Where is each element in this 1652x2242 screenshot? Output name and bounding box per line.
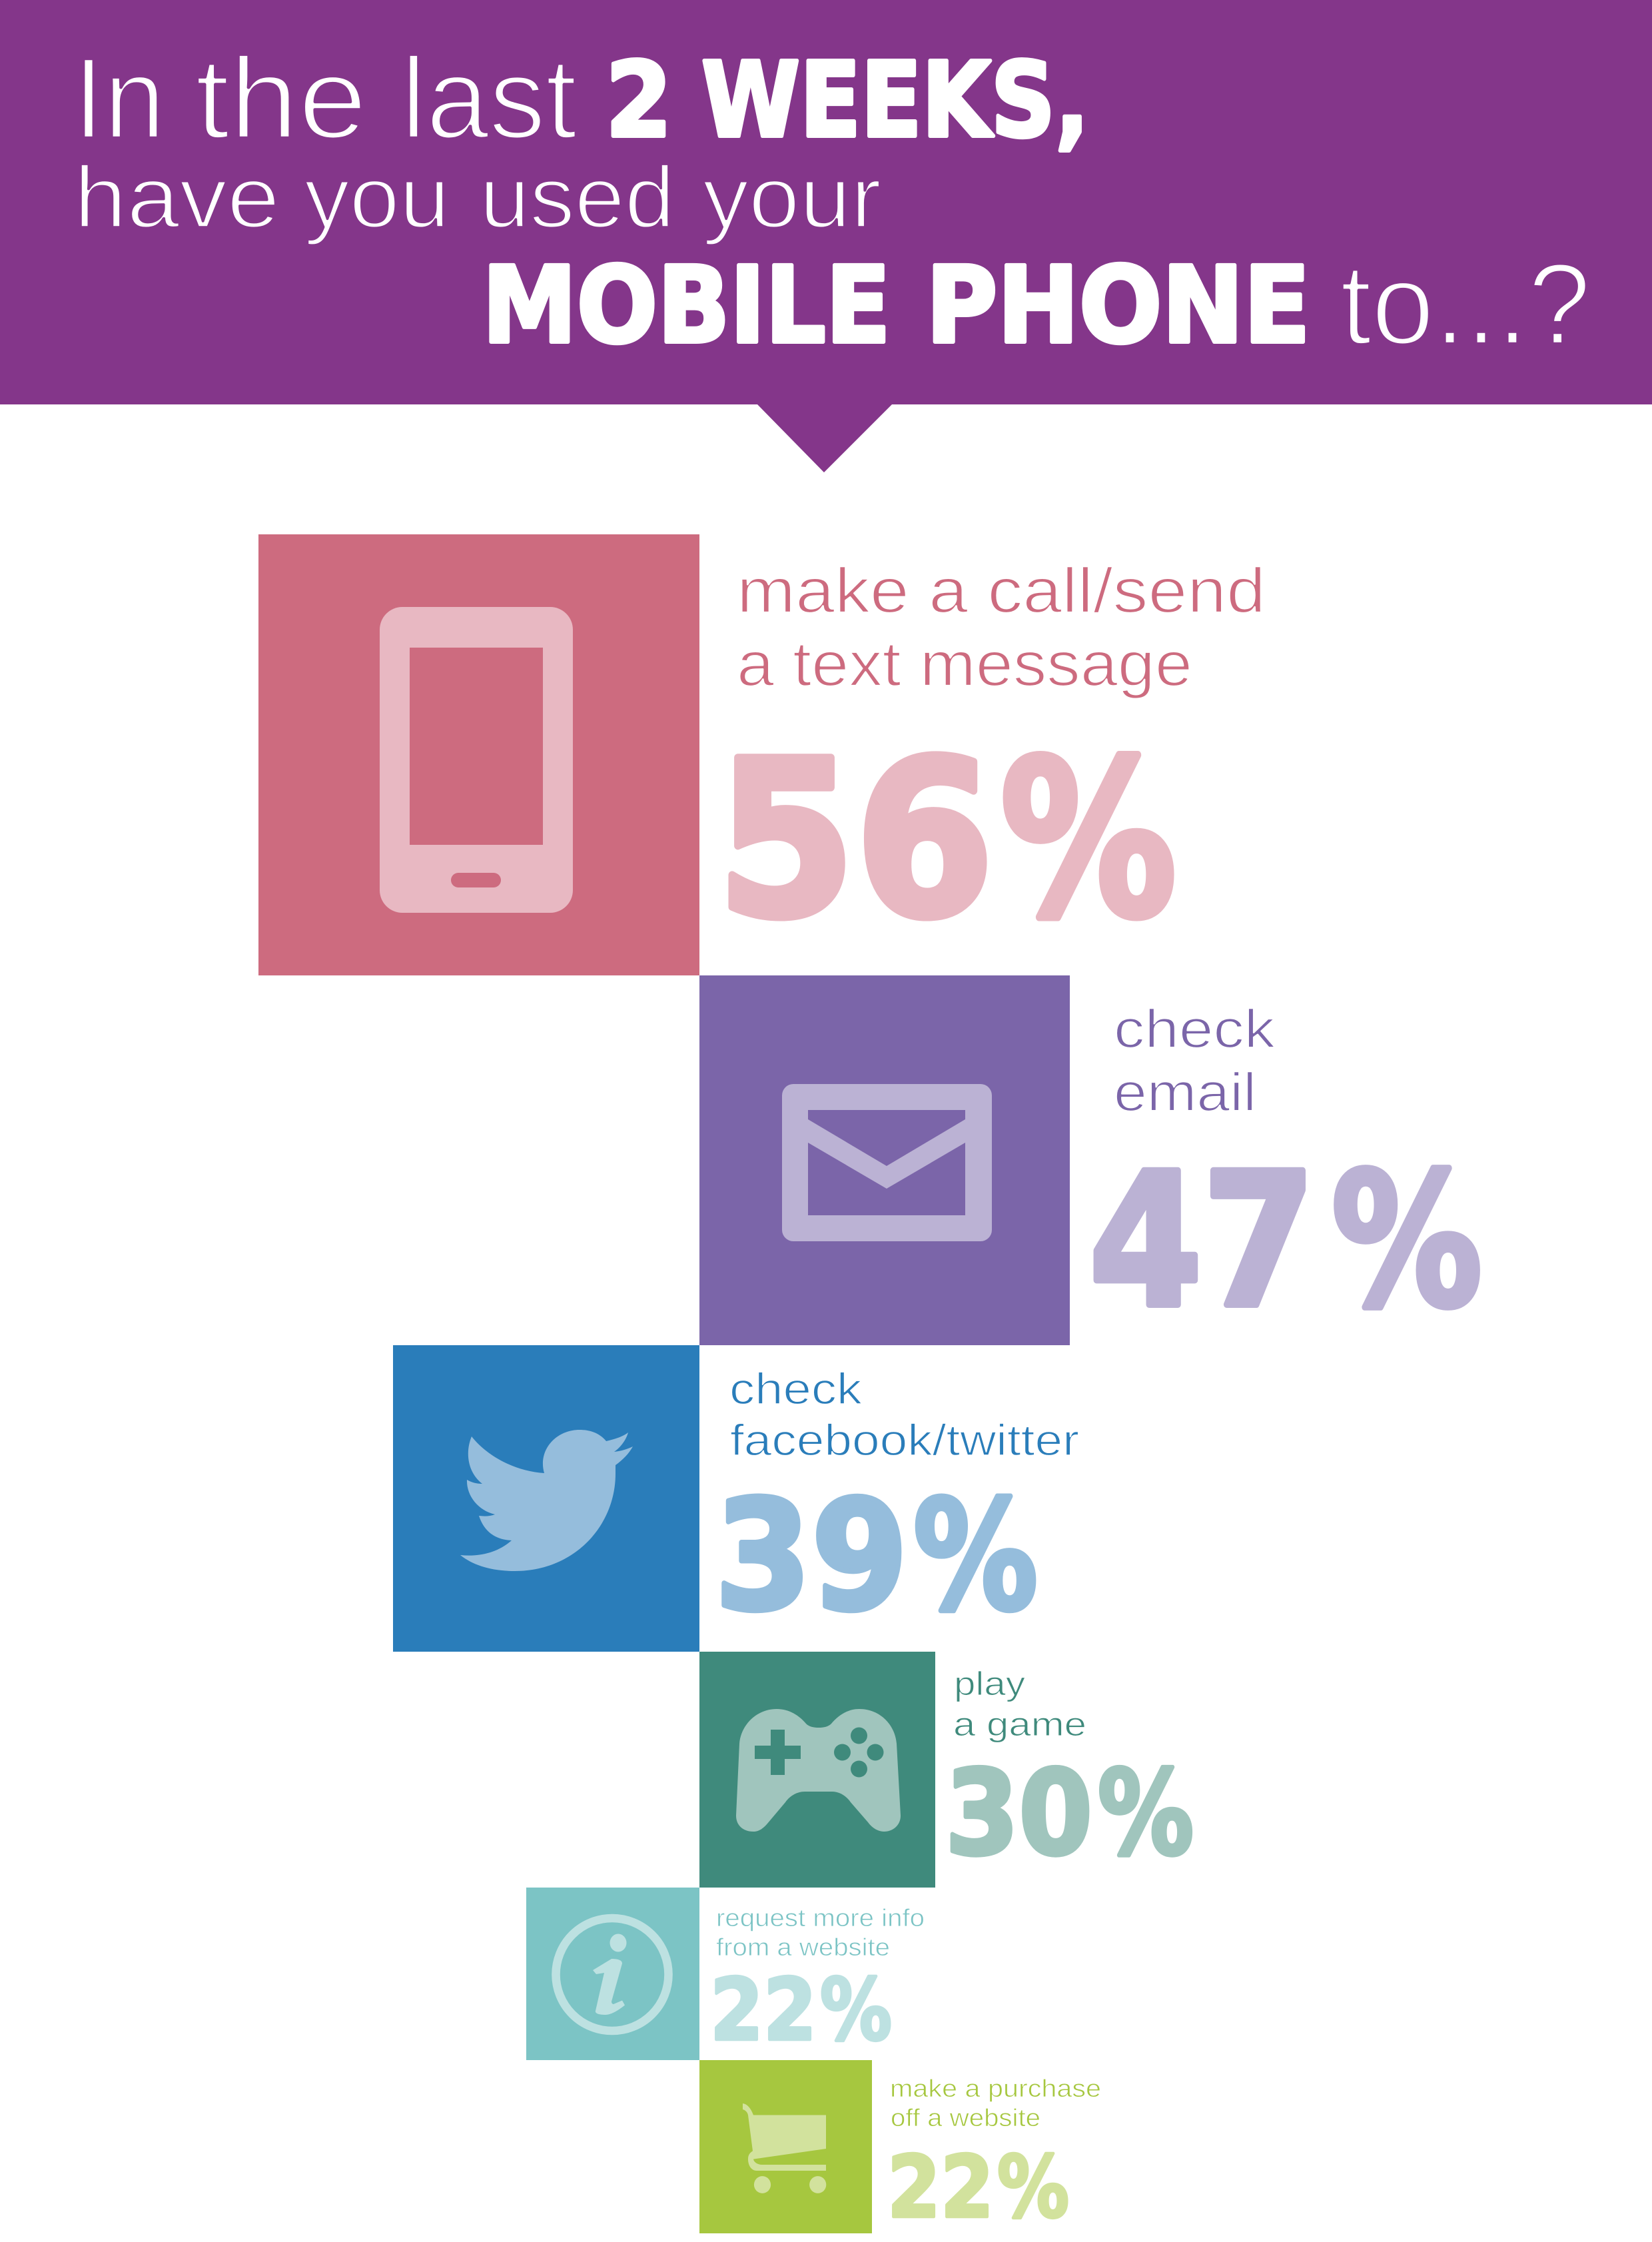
title: used: [480, 148, 675, 246]
panel: play a game: [699, 1652, 1194, 1888]
label: check email: [1114, 999, 1276, 1123]
panel: make a call / send a text message: [258, 534, 1266, 975]
icon: game controller: [736, 1709, 901, 1832]
panel: check facebook/twitter: [393, 1345, 1079, 1652]
stat: 56%: 56: [717, 715, 994, 965]
stat: 22%: 22: [887, 2138, 994, 2237]
label: check facebook/twitter: facebook/twitter: [730, 1415, 1079, 1464]
title: WEEKS,: [701, 40, 1089, 161]
title: you: [304, 148, 450, 246]
stat: 30%: [945, 1746, 1194, 1882]
label: make a purchase off a website: make a purchase: [890, 2075, 1101, 2102]
stat: 39%: [715, 1468, 1038, 1644]
stat: 47%: [1089, 1135, 1482, 1349]
teal tile: [526, 1888, 699, 2060]
stat: 47%: %: [1332, 1135, 1482, 1349]
stat: 22%: %: [820, 1961, 892, 2060]
label: check email: email: [1114, 1063, 1256, 1123]
title: the: [195, 33, 367, 163]
label: request more info from a website: from a website: [716, 1934, 890, 1961]
label: make a purchase off a website: off a website: [891, 2104, 1040, 2131]
stat: 22%: 22: [710, 1961, 817, 2060]
title: MOBILE: [482, 245, 891, 367]
title: last: [401, 33, 577, 163]
stat: 39%: %: [913, 1468, 1038, 1644]
label: check facebook/twitter: [729, 1364, 1079, 1464]
stat: 30%: %: [1098, 1746, 1194, 1882]
title: [73, 33, 1591, 368]
stat: 47%: 47: [1089, 1135, 1316, 1349]
label: check facebook/twitter: check: [729, 1364, 863, 1413]
header banner: [0, 0, 1652, 472]
icon: info circle: [556, 1918, 669, 2031]
stat: 22%: [887, 2138, 1069, 2237]
stat: 30%: 30: [945, 1746, 1092, 1882]
icon: smartphone: [380, 607, 573, 913]
stat: 39%: 39: [715, 1468, 908, 1644]
label: play a game: play: [954, 1665, 1025, 1702]
title: your: [703, 148, 881, 246]
title: 2: [606, 40, 672, 161]
purple tile: [699, 975, 1070, 1345]
title: to...?: [1340, 239, 1591, 368]
label: make a call/send a text message: [737, 556, 1266, 700]
panel: request more info from a website: [526, 1888, 925, 2060]
label: play a game: a game: [953, 1706, 1086, 1743]
lime tile: [699, 2060, 872, 2233]
label: request more info from a website: [716, 1904, 925, 1961]
panel: check email: [699, 975, 1482, 1349]
blue tile: [393, 1345, 699, 1652]
icon: twitter bird: [460, 1430, 633, 1571]
green tile: [699, 1652, 935, 1888]
stat: 56%: [717, 715, 1176, 965]
title: PHONE: [926, 245, 1310, 367]
stat: 22%: [710, 1961, 892, 2060]
label: make a purchase off a website: [890, 2075, 1101, 2131]
title: In: [73, 33, 165, 163]
label: make a call/send a text message: a text message: [737, 629, 1192, 700]
label: play a game: [953, 1665, 1086, 1743]
label: make a call/send a text message: make a call/send: [737, 556, 1266, 626]
stat: 56%: %: [1001, 715, 1176, 965]
icon: shopping cart: [743, 2103, 826, 2193]
panel: make a purchase off a website: [699, 2060, 1101, 2237]
stat: 22%: %: [997, 2138, 1069, 2237]
label: check email: check: [1114, 999, 1276, 1059]
label: request more info from a website: request more info: [716, 1904, 925, 1932]
title: have: [74, 148, 280, 246]
pink tile: [258, 534, 699, 975]
icon: envelope: [782, 1084, 992, 1241]
